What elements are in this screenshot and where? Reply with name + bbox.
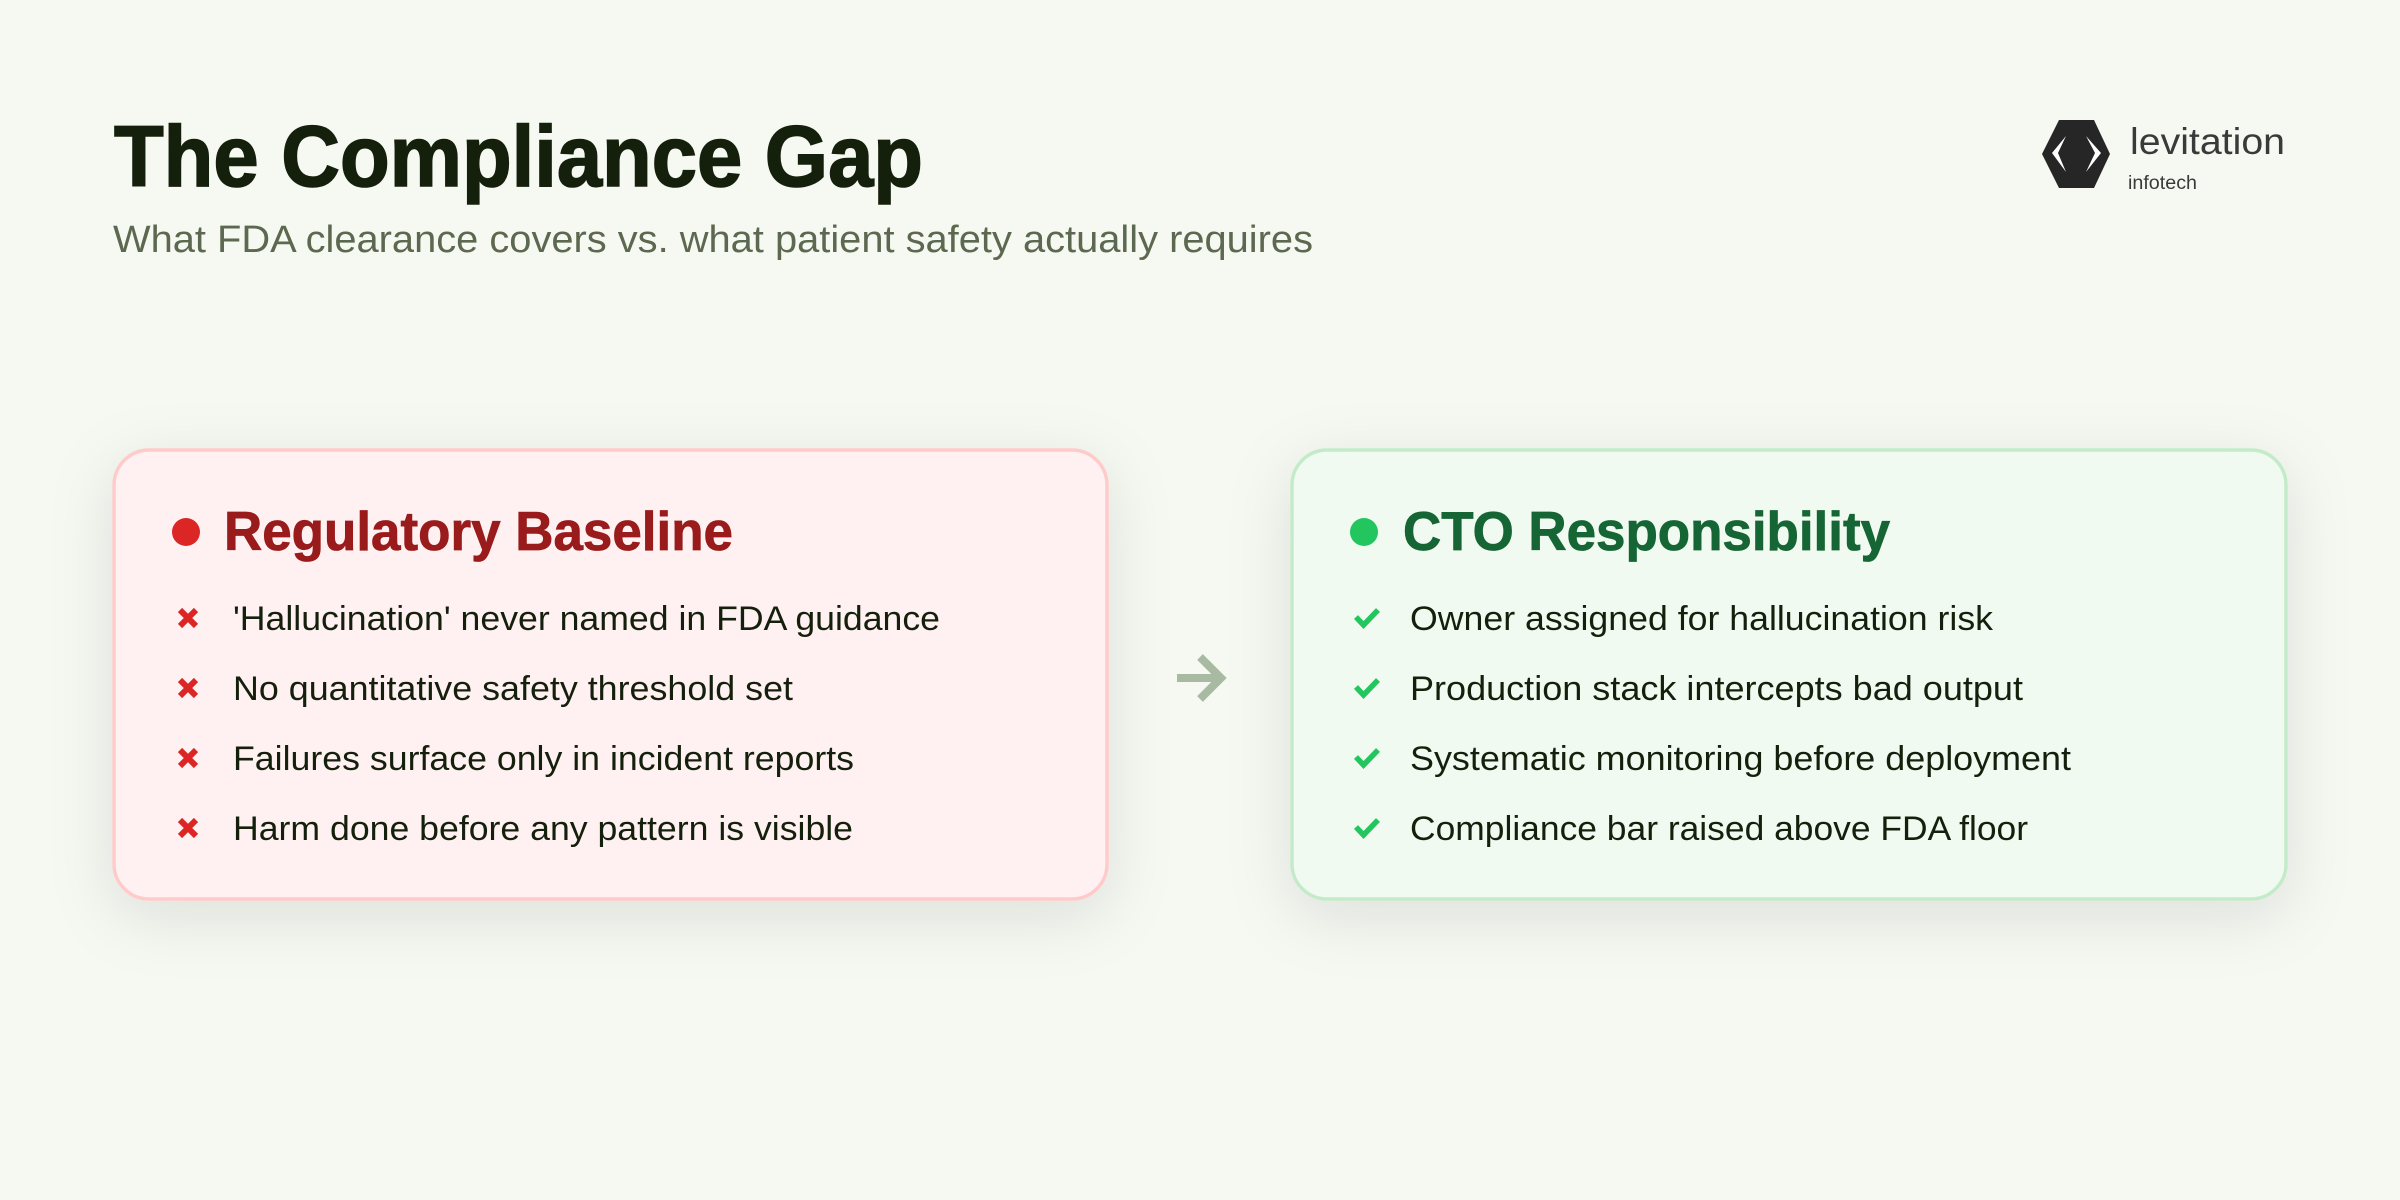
subtitle: What FDA clearance covers vs. what patient safety actually requires [113,219,1313,261]
status dot: red [172,518,200,546]
list item 4: Harm done before any pattern is visible [233,810,853,848]
logo tagline: infotech [2128,173,2197,194]
icon: hexagon logo mark [2042,120,2110,188]
panel: regulatory baseline [114,450,1107,899]
list item 3: Systematic monitoring before deployment [1410,740,2072,778]
panel: cto responsibility [1292,450,2286,899]
list item 1: Owner assigned for hallucination risk [1410,600,1994,638]
list item 1: 'Hallucination' never named in FDA guidance [233,600,940,638]
list item 3: Failures surface only in incident reports [233,740,854,778]
list item 2: No quantitative safety threshold set [233,670,794,708]
panel background [114,450,1107,899]
panel background [1292,450,2286,899]
logo: levitation infotech [2042,120,2285,194]
heading: cto responsibility: CTO Responsibility [1403,500,1890,562]
arrow [1177,657,1221,699]
list item 4: Compliance bar raised above FDA floor [1410,810,2028,848]
title: The Compliance Gap [114,109,923,205]
heading: regulatory baseline: Regulatory Baseline [224,500,733,562]
list item 2: Production stack intercepts bad output [1410,670,2024,708]
status dot: green [1350,518,1378,546]
logo wordmark: levitation [2130,121,2285,162]
